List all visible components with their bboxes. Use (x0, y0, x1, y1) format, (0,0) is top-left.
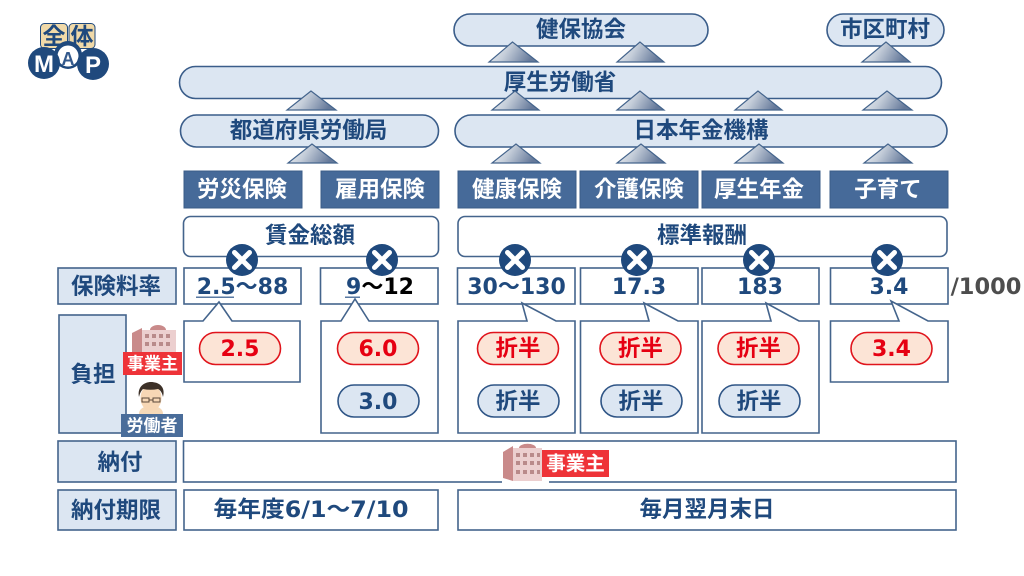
rate: 介護: 17.3 (612, 275, 666, 300)
logo: 全体MAP: 体 (70, 23, 94, 49)
multiply icon 3 (499, 244, 531, 276)
heading: 雇用保険 (321, 171, 439, 208)
rate: 健康 (458, 268, 575, 304)
logo: 全体MAP: P (85, 52, 101, 79)
multiply icon 4 (621, 244, 653, 276)
rate: 健康: 30～130 (467, 275, 566, 300)
logo: 全体MAP: M (34, 51, 54, 78)
row label: 納付 (58, 441, 176, 482)
logo: 全体MAP: A (62, 49, 74, 69)
rate: 雇用: 9～12 (346, 275, 414, 300)
callout: 介護 負担 (580, 303, 698, 433)
row label: 保険料率 (58, 268, 176, 304)
panel: 納付 (184, 441, 956, 482)
pill: 日本年金機構: 日本年金機構 (633, 118, 769, 143)
panel: 毎月翌月末日 (458, 490, 956, 530)
pill: 事業主 折半: 折半 (618, 336, 663, 361)
heading: 厚生年金: 厚生年金 (714, 177, 804, 202)
heading: 厚生年金 (702, 171, 820, 208)
pill: 市区町村: 市区町村 (840, 17, 930, 42)
rate: 子育て: 3.4 (870, 275, 908, 300)
pill: 労働者 折半: 折半 (618, 389, 664, 414)
pill: 労働者 折半: 折半 (495, 389, 541, 414)
pill: 事業主 折半: 折半 (495, 336, 541, 361)
logo: 全体MAP (28, 23, 109, 80)
row label: 負担 (59, 315, 126, 433)
pill: 事業主 2.5: 2.5 (221, 337, 259, 362)
arrows: 厚生労働省 to agencies (287, 91, 912, 110)
multiply icon 2 (366, 244, 398, 276)
heading: 健康保険: 健康保険 (472, 177, 562, 202)
panel: 毎年度 (184, 490, 438, 530)
icon: 事業主 building with label (123, 325, 182, 375)
rate: 厚生年金: 183 (737, 275, 783, 300)
pill: 市区町村 (827, 14, 944, 46)
rate: 子育て (830, 268, 948, 304)
icon: 労働者 person with label: 労働者 (126, 416, 178, 436)
pill: 事業主 6.0: 6.0 (359, 337, 397, 362)
heading: 労災保険: 労災保険 (197, 177, 287, 202)
row label: 納付期限 (58, 490, 176, 530)
unit: /1000: /1000 (951, 274, 1021, 300)
pill: 都道府県労働局: 都道府県労働局 (230, 118, 387, 143)
callout: 健康 負担 (458, 303, 575, 433)
row label: 保険料率: 保険料率 (71, 274, 161, 299)
pill: 労働者 3.0: 3.0 (359, 390, 397, 415)
base: 標準報酬: 標準報酬 (657, 223, 747, 248)
icon: 事業主 building with label (502, 444, 609, 485)
pill: 健保協会: 健保協会 (536, 17, 626, 42)
panel: 毎月翌月末日: 毎月翌月末日 (639, 497, 775, 522)
icon: 事業主 building with label: 事業主 (546, 453, 605, 475)
heading: 雇用保険: 雇用保険 (335, 177, 425, 202)
multiply icon 5 (743, 244, 775, 276)
pill: 厚生労働省 (180, 66, 942, 98)
callout: 厚生年金 負担 (702, 303, 819, 433)
rate: 雇用 (320, 268, 438, 304)
heading: 介護保険 (580, 171, 698, 208)
callout: 子育て 負担 (830, 301, 948, 382)
heading: 子育て: 子育て (854, 177, 922, 202)
multiply icon 1 (226, 244, 258, 276)
pill: 事業主 折半: 折半 (736, 336, 781, 361)
arrows: insurance to agencies (288, 144, 912, 163)
row label: 負担: 負担 (70, 362, 116, 387)
callout: 労災 負担 (184, 302, 300, 382)
rate: 労災 (184, 268, 301, 304)
arrows: 健保協会 and 市区町村 to 厚生労働省 (489, 42, 910, 62)
rate: 厚生年金 (702, 268, 819, 304)
pill: 事業主 3.4: 3.4 (872, 337, 911, 362)
heading: 労災保険 (184, 171, 302, 208)
icon: 労働者 person with label (121, 382, 183, 437)
logo: 全体MAP: 全 (42, 23, 66, 49)
pill: 日本年金機構 (455, 115, 947, 147)
pill: 厚生労働省: 厚生労働省 (504, 70, 616, 95)
base: 賃金総額: 賃金総額 (265, 223, 355, 248)
pill: 都道府県労働局 (180, 115, 438, 147)
callout: 雇用 負担 (321, 299, 438, 433)
pill: 健保協会 (454, 14, 708, 46)
heading: 健康保険 (458, 171, 576, 208)
rate: 労災: 2.5～88 (197, 275, 288, 300)
heading: 子育て (830, 171, 948, 208)
base: 標準報酬 (458, 216, 947, 256)
pill: 労働者 折半: 折半 (736, 389, 782, 414)
heading: 介護保険: 介護保険 (594, 177, 684, 202)
rate: 介護 (580, 268, 698, 304)
row label: 納付期限: 納付期限 (71, 498, 161, 523)
multiply icon 6 (871, 244, 903, 276)
panel: 毎年度: 毎年度6/1～7/10 (214, 497, 408, 523)
row label: 納付: 納付 (97, 450, 143, 475)
base: 賃金総額 (184, 216, 438, 256)
icon: 事業主 building with label: 事業主 (127, 354, 178, 374)
